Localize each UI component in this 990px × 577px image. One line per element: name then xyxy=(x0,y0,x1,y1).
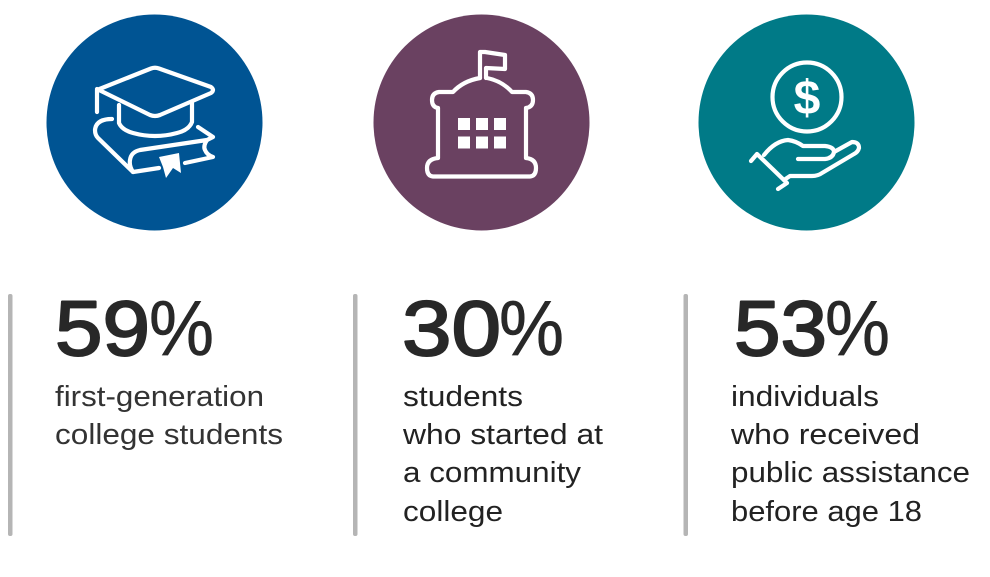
stat value 30%: % xyxy=(499,284,564,372)
description 3: individuals xyxy=(731,381,879,413)
icon: hand holding dollar coin: $ xyxy=(794,72,821,125)
stat value 53%: 53 xyxy=(734,284,827,372)
icon detail: bookmark ribbon xyxy=(159,153,181,178)
description 2 xyxy=(402,381,603,528)
stat 3: received public assistance before 18 xyxy=(684,284,970,536)
stat value 53% xyxy=(734,284,890,372)
description 2: college xyxy=(403,496,503,528)
description 2: students xyxy=(403,381,523,413)
description 1: first-generation xyxy=(55,381,264,413)
description 3 xyxy=(730,381,970,528)
stat 1: first-generation college students xyxy=(8,284,283,536)
description 3: public assistance xyxy=(731,457,970,489)
description 1: college students xyxy=(55,419,283,451)
stat value 59% xyxy=(55,284,214,372)
stat 2: started at a community college xyxy=(353,284,603,536)
stat value 30% xyxy=(402,284,564,372)
stat value 30%: 30 xyxy=(402,284,501,372)
description 3: before age 18 xyxy=(731,496,922,528)
description 3: who received xyxy=(730,419,920,451)
stat value 59%: % xyxy=(149,284,214,372)
description 2: a community xyxy=(403,457,582,489)
icon: hand holding dollar coin xyxy=(698,14,914,230)
icon: school building with flag xyxy=(374,14,590,230)
stat value 53%: % xyxy=(825,284,890,372)
icon: graduation cap on book xyxy=(46,14,262,230)
stat value 59%: 59 xyxy=(55,284,150,372)
description 2: who started at xyxy=(402,419,603,451)
description 1 xyxy=(55,381,283,451)
